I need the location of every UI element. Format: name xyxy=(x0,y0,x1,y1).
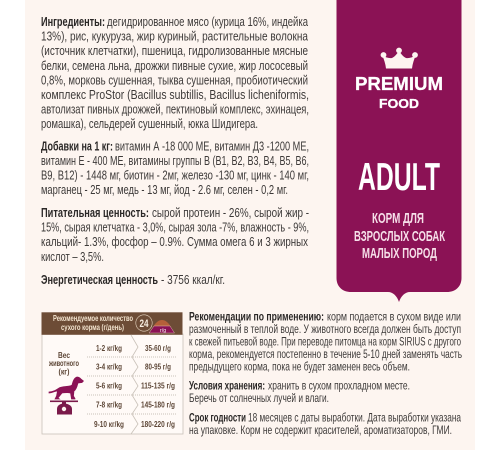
heading: premium: PREMIUM xyxy=(355,73,443,94)
icon: bowl xyxy=(149,320,174,334)
row: 7-8 kg xyxy=(96,400,175,410)
text block: additives: витамин Е - 400 МЕ, витамины группы В (В1, В2, В3, В4, В5, В6, xyxy=(41,153,309,168)
text block: ingredients: 13%), рис, кукуруза, жир куриный, растительные волокна xyxy=(41,29,309,44)
weight label: животного xyxy=(48,358,79,368)
row: 3-4 kg: 3-4 кг/kg xyxy=(96,362,122,372)
icon: dog xyxy=(49,377,84,399)
table body xyxy=(42,334,183,434)
text block: ingredients: (источник клетчатки), пшеница, гидролизованные мясные xyxy=(41,43,308,58)
text block: storage conditions: Условия хранения: xyxy=(189,378,265,392)
heading: food: FOOD xyxy=(379,97,419,111)
feeding table xyxy=(42,312,183,434)
text block: nutritional value: сырой протеин - 26%, сырой жир - xyxy=(152,205,309,220)
text block: energy value: Энергетическая ценность xyxy=(41,272,158,287)
row: 1-2 kg xyxy=(96,343,171,353)
row: 5-6 kg xyxy=(96,380,175,390)
row: 1-2 kg: 35-60 г/g xyxy=(145,343,171,353)
text block: usage recommendations: Рекомендации по применению: xyxy=(189,310,324,324)
text block: additives: В9, В12) - 1448 мг, биотин - 2мг, железо -130 мг, цинк - 140 мг, xyxy=(41,168,309,183)
text block: ingredients: автолизат пивных дрожжей, пектиновый комплекс, эхинацея, xyxy=(41,102,309,117)
text block: nutritional value: Питательная ценность: xyxy=(41,205,149,220)
row: 9-10 kg xyxy=(94,419,175,429)
row: 9-10 kg: 180-220 г/g xyxy=(141,419,175,429)
subtitle: product description: КОРМ ДЛЯ xyxy=(372,211,424,227)
weight label: (кг) xyxy=(58,366,70,376)
text block: nutritional value: кальций- 1.3%, фосфор – 0.9%. Сумма омега 6 и 3 жирных xyxy=(41,234,308,249)
panel: premium food ribbon xyxy=(336,0,462,302)
text block: nutritional value: кислот – 3,5%. xyxy=(41,249,104,264)
text block: storage conditions xyxy=(189,378,410,405)
text block: shelf life: Срок годности xyxy=(189,410,246,424)
table header: Рекомендуемое количество xyxy=(53,314,133,323)
row: 5-6 kg: 115-135 г/g xyxy=(141,380,175,390)
weight label: Вес xyxy=(58,350,70,360)
row: 5-6 kg: 5-6 кг/kg xyxy=(96,380,122,390)
text block: additives xyxy=(41,138,309,197)
chevrons xyxy=(131,335,138,434)
row: 9-10 kg: 9-10 кг/kg xyxy=(94,419,124,429)
text block: nutritional value: 15%, сырая клетчатка - 3,0%, сырая зола -7%, влажность - 9%, xyxy=(41,220,309,235)
row: 7-8 kg: 7-8 кг/kg xyxy=(96,400,122,410)
subtitle: product description xyxy=(354,211,445,262)
text block: shelf life xyxy=(189,410,461,437)
row: 7-8 kg: 145-180 г/g xyxy=(141,400,175,410)
table header: сухого корма (г/день) xyxy=(61,323,124,332)
table header xyxy=(42,312,182,335)
text block: ingredients: комплекс ProStor (Bacillus subtillis, Bacillus licheniformis, xyxy=(41,87,309,102)
text block: ingredients: ромашка), сельдерей сушенный, юкка Шидигера. xyxy=(41,116,258,131)
subtitle: product description: МАЛЫХ ПОРОД xyxy=(362,246,437,262)
icon: bowl: г/g xyxy=(160,328,166,334)
text block: additives: марганец - 25 мг, медь - 13 мг, йод - 2.6 мг, селен - 0,2 мг. xyxy=(41,182,288,197)
row dividers xyxy=(87,357,177,414)
weight label xyxy=(48,350,79,376)
text block: ingredients: дегидрированное мясо (курица 16%, индейка xyxy=(107,14,309,29)
text block: storage conditions: Беречь от солнечных лучей и влаги. xyxy=(189,391,329,405)
text block: nutritional value xyxy=(41,205,309,264)
icon: scale xyxy=(50,400,78,414)
text block: additives: Добавки на 1 кг: xyxy=(41,138,113,154)
icon: crown xyxy=(381,48,418,68)
text block: ingredients: Ингредиенты: xyxy=(41,14,105,29)
subtitle: product description: ВЗРОСЛЫХ СОБАК xyxy=(354,229,445,245)
text block: ingredients: 0,8%, морковь сушенная, тыква сушенная, пробиотический xyxy=(41,72,308,87)
text block: energy value: - 3756 ккал/кг. xyxy=(161,272,225,287)
text block: ingredients: белки, семена льна, дрожжи пивные сухие, жир лососевый xyxy=(41,58,308,73)
text block: additives: витамин А -18 000 МЕ, витамин Д3 -1200 МЕ, xyxy=(115,138,309,154)
heading: adult: ADULT xyxy=(358,156,440,199)
row: 3-4 kg: 80-95 г/g xyxy=(145,362,171,372)
table header: 24 xyxy=(140,318,149,330)
text block: usage recommendations xyxy=(189,310,462,374)
row: 3-4 kg xyxy=(96,362,171,372)
text block: ingredients xyxy=(41,14,309,131)
row: 1-2 kg: 1-2 кг/kg xyxy=(96,343,122,353)
text block: storage conditions: хранить в сухом прохладном месте. xyxy=(268,378,410,392)
